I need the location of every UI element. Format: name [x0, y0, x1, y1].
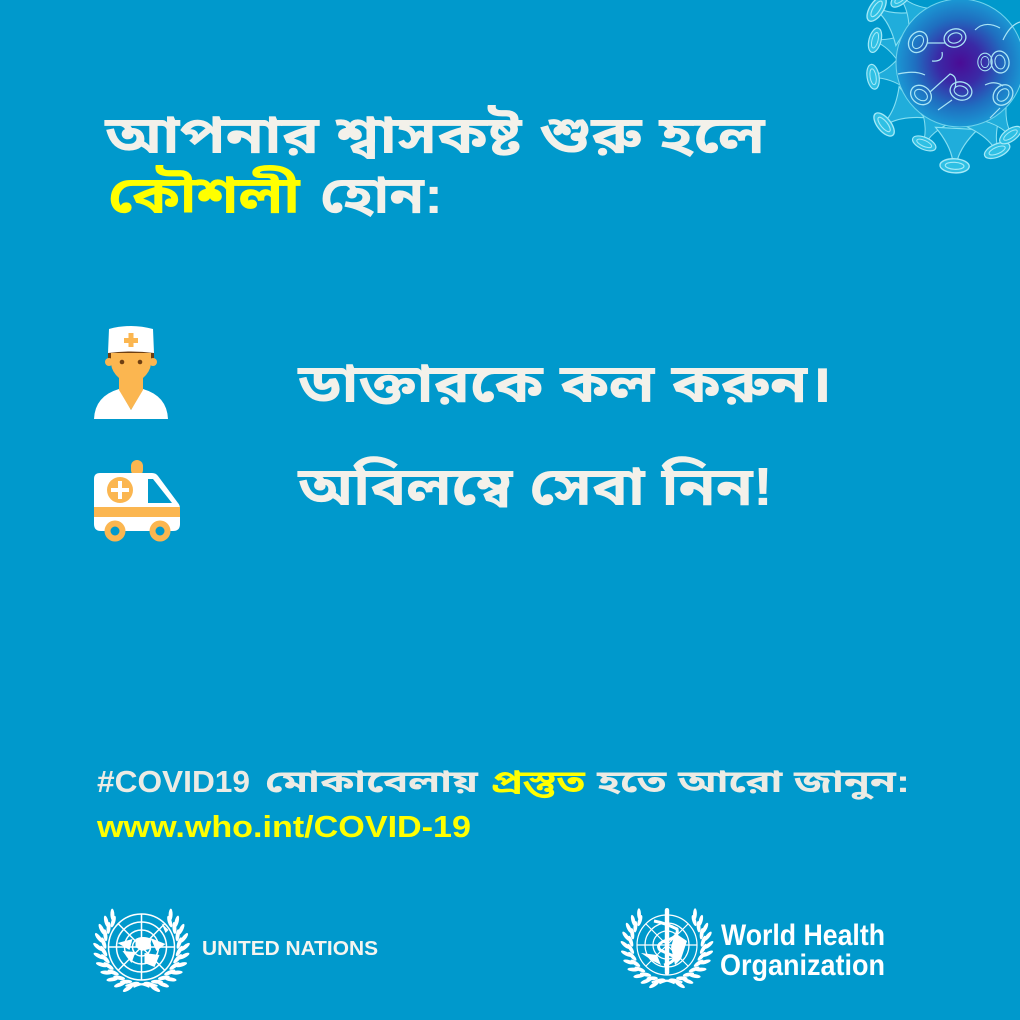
footer word 1: মোকাবেলায় [265, 764, 479, 799]
title highlighted word: কৌশলী [108, 165, 301, 225]
footer call to action [97, 764, 910, 800]
icon: ambulance [94, 460, 180, 542]
hashtag: #COVID19 [97, 764, 250, 799]
title line 2 end: হোন: [320, 167, 443, 225]
wordmark line 1: World Health [721, 919, 885, 952]
label: United Nations: UNITED NATIONS [202, 938, 378, 960]
footer remaining words: হতে আরো জানুন: [596, 764, 910, 800]
logo: United Nations emblem [92, 909, 191, 993]
instruction: call the doctor: ডাক্তারকে কল করুন। [297, 354, 832, 414]
website link: www.who.int/COVID-19 [96, 809, 471, 844]
title line 1: আপনার শ্বাসকষ্ট শুরু হলে [104, 105, 766, 165]
footer highlighted word: প্রস্তুত [491, 764, 587, 799]
icon: doctor [94, 326, 168, 419]
title [104, 105, 766, 225]
wordmark line 2: Organization [720, 949, 885, 982]
label: World Health Organization [720, 919, 885, 982]
virus illustration [860, 0, 1020, 174]
instruction: seek care immediately: অবিলম্বে সেবা নিন! [297, 456, 773, 517]
logo: World Health Organization emblem [620, 908, 714, 989]
